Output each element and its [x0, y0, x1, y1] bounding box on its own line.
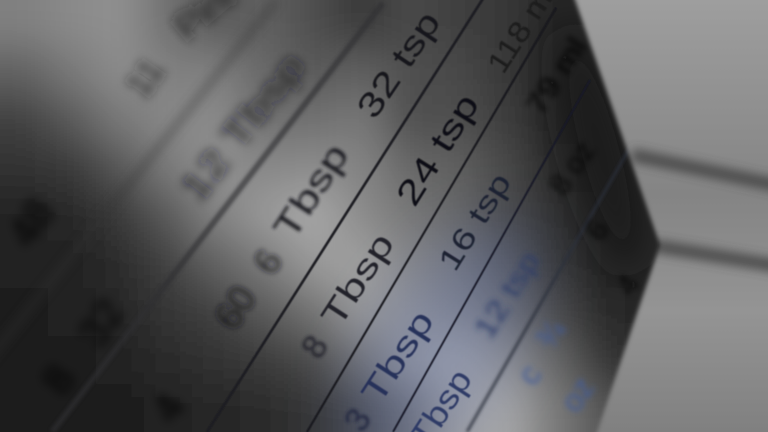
text: Tbsp in the 8 Tbsp row: Tbsp [314, 226, 402, 334]
sharp text: 16 tsp: 16 tsp [431, 167, 518, 277]
blurred text: far left marks: 4 [142, 385, 194, 430]
sharp text: 32 tsp: 32 tsp [350, 5, 448, 125]
blurred text: 60: 60 [207, 279, 265, 337]
blurred text: far left marks: 8 [32, 357, 84, 402]
blurred text: right column marks: 8 oz [543, 136, 602, 201]
blurred text: far left marks: 32 [69, 290, 134, 355]
blurred text: blue lower right marks: c [510, 358, 549, 391]
sharp text: 24 tsp: 24 tsp [389, 87, 487, 213]
blurred text: far left marks: 48 [0, 190, 64, 255]
blurred text: Tbsp on the 6 c row: Tbsp [265, 136, 357, 246]
blurred text: blue lower right marks [520, 322, 596, 412]
blurred text: 11: 11 [117, 51, 172, 105]
blurred text: right column marks: 6 [579, 214, 616, 246]
blurred text: 6: 6 [245, 242, 290, 281]
blurred text: right column marks: 4 [610, 269, 647, 301]
blurred text: blue lower right marks: ¾ [528, 312, 573, 356]
blurred text: 79 ml: 79 ml [520, 32, 593, 121]
text: 8: 8 [294, 329, 336, 365]
blurred text: far left marks [14, 199, 182, 418]
text: Tbsp in the 3 Tbsp row: Tbsp [354, 304, 442, 410]
blue tint of the light pool [328, 218, 552, 432]
blurred text: 12 tsp: 12 tsp [468, 246, 547, 345]
blurred text: right column marks [549, 144, 638, 293]
shadow stripes on the background [632, 155, 768, 268]
dark falloff near the right edge [560, 54, 640, 251]
blurred text: 12 Tbsp: 12 Tbsp [173, 46, 313, 210]
blurred text: blue lower right marks: oz [553, 370, 602, 419]
